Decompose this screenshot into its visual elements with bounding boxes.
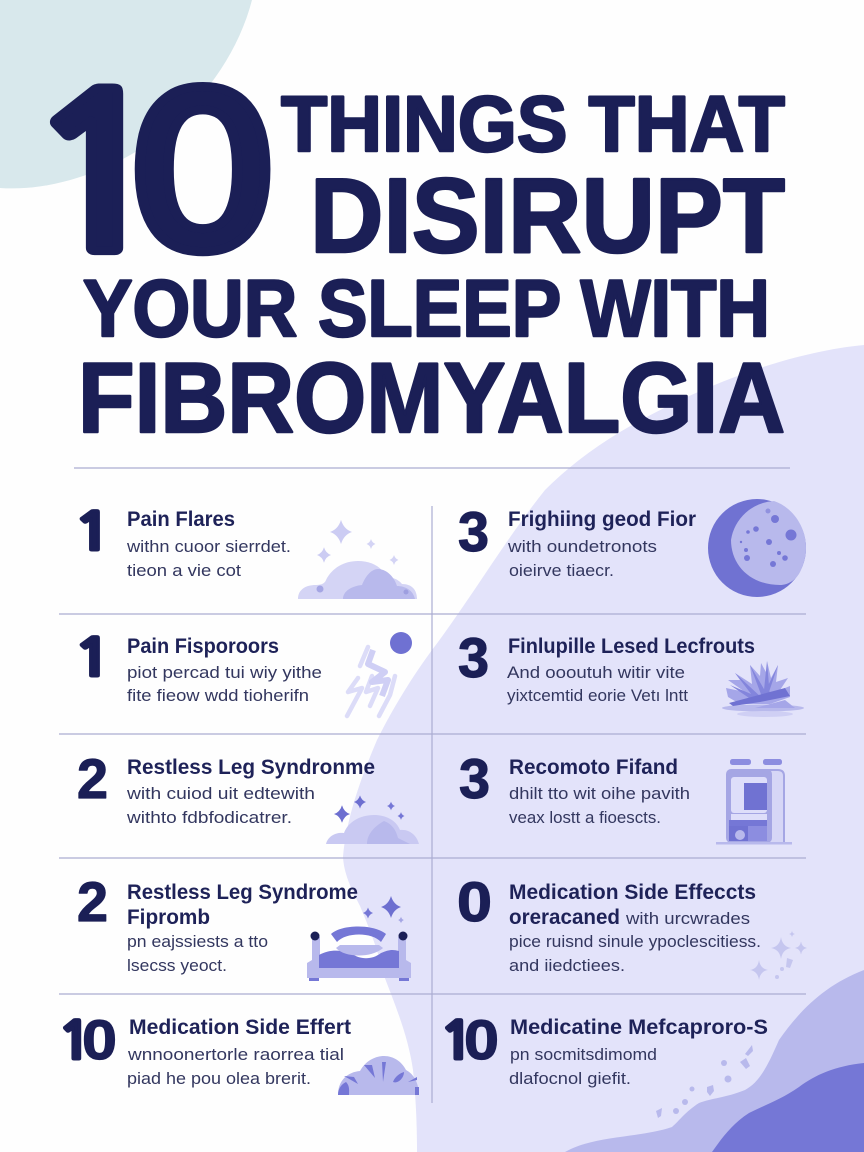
description: pn socmitsdimomd	[510, 1045, 657, 1064]
description	[509, 1045, 657, 1088]
description: piot percad tui wiy yithe	[127, 663, 322, 682]
number: 0	[82, 1008, 117, 1071]
description: dhilt tto wit oihe pavith	[509, 784, 690, 803]
heading: Recomoto Fifand	[509, 756, 678, 779]
icon: lightning bolts and orb	[347, 632, 412, 716]
description: oieirve tiaecr.	[509, 561, 614, 580]
description	[126, 537, 291, 580]
description	[127, 1045, 344, 1088]
number: 1	[73, 632, 113, 684]
background: indigo wave	[712, 1063, 864, 1152]
description	[127, 932, 268, 975]
icon: faint sparkles	[750, 931, 807, 980]
icon: cloud with dark stars	[326, 795, 419, 844]
title line: your sleep with: YOUR SLEEP WITH	[83, 264, 770, 354]
heading: Medicatine Mefcaproro-S	[510, 1016, 768, 1039]
heading: Restless Leg Syndrome	[127, 881, 358, 904]
item: right row 4	[457, 870, 807, 980]
item: left row 1	[73, 506, 417, 599]
heading: Fipromb	[127, 906, 210, 929]
description: withn cuoor sierrdet.	[126, 537, 291, 556]
icon: medicine bottles	[716, 759, 792, 844]
description: pice ruisnd sinule ypoclescitiess.	[509, 932, 761, 951]
description	[509, 906, 761, 975]
description	[507, 663, 688, 705]
number: 1	[57, 1015, 93, 1067]
icon: crescent moon	[708, 499, 806, 597]
icon: patterned dome	[338, 1056, 419, 1095]
description: oreracaned	[509, 906, 620, 929]
heading: Medication Side Effeccts	[509, 881, 756, 904]
number: 2	[77, 870, 108, 933]
number: 3	[458, 500, 489, 563]
item: left row 5	[57, 1008, 419, 1095]
heading: Frighiing geod Fior	[508, 508, 696, 531]
description	[126, 784, 315, 827]
description: and iiedctiees.	[509, 956, 625, 975]
background: lavender wave	[343, 345, 864, 1152]
background: periwinkle wave	[565, 970, 864, 1152]
title line: fibromyalgia: FIBROMYALGIA	[78, 342, 785, 453]
description: fite fieow wdd tioherifn	[127, 686, 309, 705]
description: withto fdbfodicatrer.	[126, 808, 292, 827]
title numeral 10: 10	[23, 70, 278, 282]
description: with urcwrades	[625, 909, 750, 928]
heading: Pain Flares	[127, 508, 235, 531]
description: veax lostt a fioescts.	[509, 808, 661, 827]
number: 2	[77, 747, 108, 810]
item: left row 3	[77, 747, 419, 844]
icon: cloud with stars	[298, 520, 417, 599]
description: lsecss yeoct.	[127, 956, 227, 975]
icon: spiky plant	[722, 661, 804, 717]
title	[23, 70, 785, 453]
heading	[127, 881, 358, 929]
description: tieon a vie cot	[127, 561, 241, 580]
item: right row 3	[459, 747, 792, 844]
description: with cuiod uit edtewith	[126, 784, 315, 803]
heading: Restless Leg Syndronme	[127, 756, 375, 779]
description: with oundetronots	[507, 537, 657, 556]
background: teal blob	[0, 0, 252, 188]
number: 1	[73, 506, 113, 558]
item: left row 4	[77, 870, 411, 981]
title line: things that: THINGS THAT	[281, 79, 785, 168]
description	[507, 537, 657, 580]
number: 1	[439, 1015, 475, 1067]
heading: Pain Fisporoors	[127, 635, 279, 658]
number: 3	[458, 626, 489, 689]
item: left row 2	[73, 632, 412, 716]
number: 3	[459, 747, 490, 810]
description	[509, 784, 690, 827]
heading: Finlupille Lesed Lecfrouts	[508, 635, 755, 658]
heading: Medication Side Effert	[129, 1016, 351, 1039]
number: 0	[457, 870, 492, 933]
description: pn eajssiests a tto	[127, 932, 268, 951]
icon: scattered pebbles	[656, 1045, 753, 1118]
item: right row 5	[439, 1008, 768, 1118]
description: And oooutuh witir vite	[507, 663, 685, 682]
description: wnnoonertorle raorrea tial	[127, 1045, 344, 1064]
item: right row 1	[458, 499, 806, 597]
description: dlafocnol giefit.	[509, 1069, 631, 1088]
number: 0	[464, 1008, 499, 1071]
description: yixtcemtid eorie Vetı lntt	[507, 686, 688, 705]
description	[127, 663, 322, 705]
title line: disirupt: DISIRUPT	[310, 157, 785, 275]
item: right row 2	[458, 626, 804, 717]
icon: bed	[307, 896, 411, 981]
description: piad he pou olea brerit.	[127, 1069, 311, 1088]
